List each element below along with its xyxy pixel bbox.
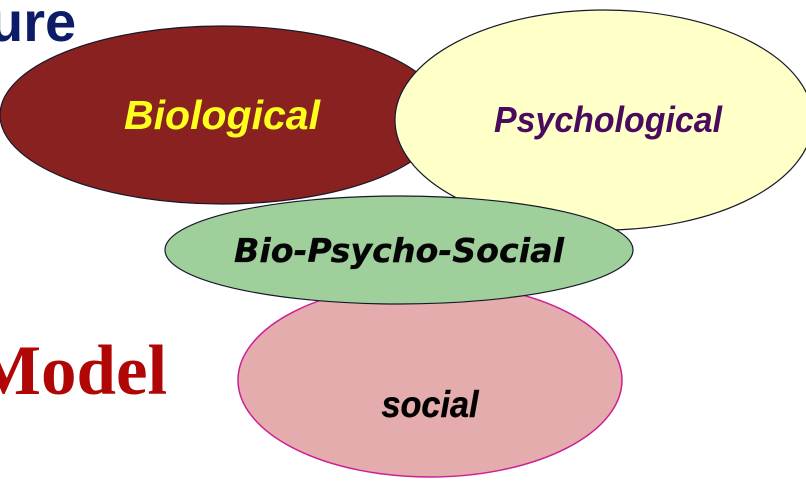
ellipse: psychological: Psychological (494, 99, 723, 140)
ellipse: biological: Biological (124, 92, 322, 138)
ellipse: biological (0, 26, 444, 204)
ellipse: bio-psycho-social: Bio-Psycho-Social (234, 231, 565, 270)
ellipse: bio-psycho-social (165, 196, 633, 304)
ellipse: social (238, 283, 622, 477)
ellipse: social: social (382, 384, 479, 425)
ellipse: psychological (395, 10, 806, 230)
